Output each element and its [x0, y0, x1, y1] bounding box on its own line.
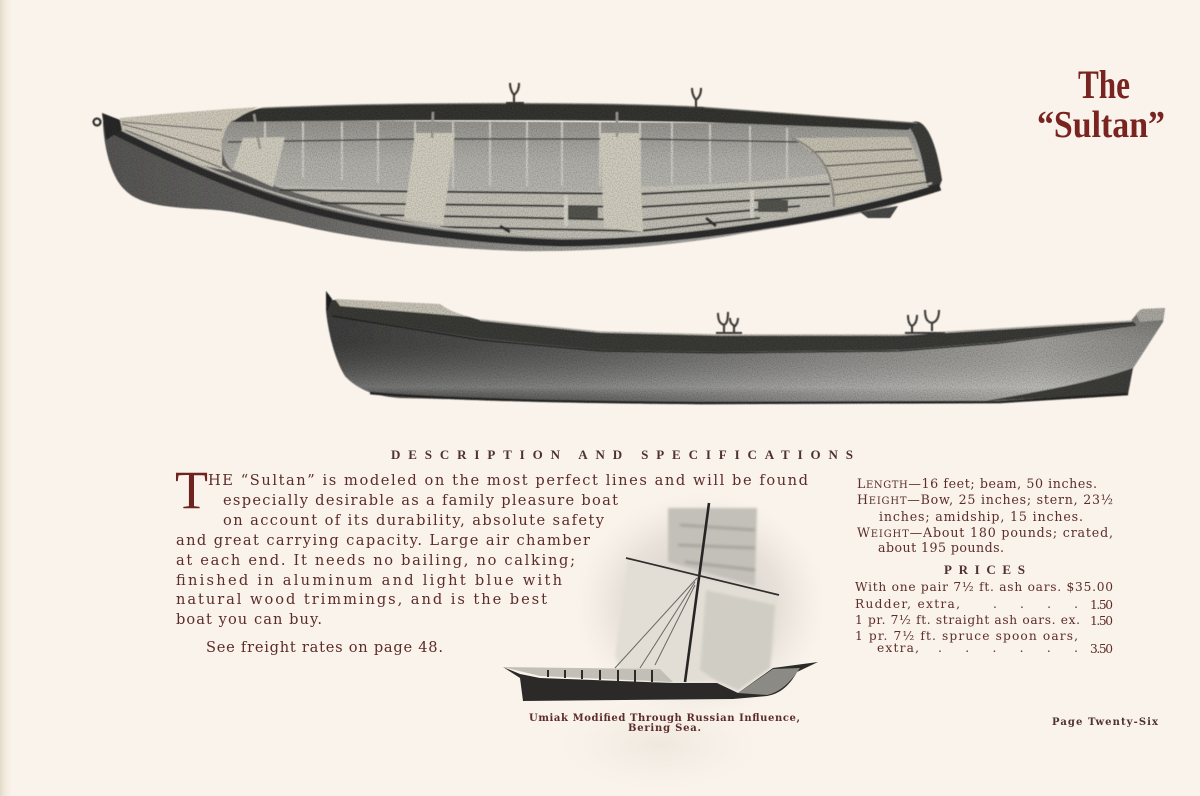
- stem: [326, 291, 332, 312]
- specifications: inches; amidship, 15 inches.: [879, 509, 1083, 524]
- bow deck: [120, 107, 258, 172]
- caption: Bering Sea.: [628, 723, 701, 734]
- sheer strake: [328, 300, 1136, 352]
- keel line: [370, 393, 1128, 403]
- hull interior: [503, 667, 673, 682]
- price list: 1.50: [1090, 614, 1113, 628]
- stern transom: [910, 122, 942, 190]
- photo: umiak with sails: [503, 493, 825, 790]
- heading: description and specifications: DESCRIPTION AND SPECIFICATIONS: [391, 447, 853, 462]
- hull exterior: [103, 122, 940, 251]
- description paragraph: [175, 460, 808, 656]
- title: The Sultan: [1037, 62, 1165, 146]
- seat: bow: [233, 137, 285, 187]
- ribs and stringer: [265, 122, 787, 188]
- lower gunwale: [108, 128, 940, 243]
- mast: [685, 503, 709, 682]
- photo: side view of boat: [326, 291, 1165, 404]
- yard: [626, 558, 779, 595]
- upper gunwale: [232, 103, 917, 130]
- stern shadow: [985, 368, 1133, 401]
- price list: [855, 580, 1113, 656]
- inner oarlock: [500, 218, 716, 232]
- floor slats: [272, 178, 834, 238]
- seat supports: [254, 112, 617, 149]
- description paragraph: natural wood trimmings, and is the best: [176, 591, 547, 608]
- photo: top view of boat: [94, 83, 942, 251]
- oarlock pair right: [905, 310, 945, 333]
- specifications: WEIGHT—About 180 pounds; crated,: [857, 525, 1113, 540]
- keel skeg: [860, 206, 898, 218]
- oarlock pair left: [716, 312, 742, 333]
- stern deck: [792, 137, 930, 207]
- page number: Page Twenty-Six: [1052, 717, 1159, 728]
- stern cap: [1136, 308, 1165, 322]
- price list: extra,: [877, 641, 919, 655]
- description paragraph: finished in aluminum and light blue with: [176, 572, 562, 589]
- hull side: [326, 292, 1165, 404]
- specifications: [857, 476, 1113, 555]
- price list: 1.50: [1090, 598, 1113, 612]
- specifications: HEIGHT—Bow, 25 inches; stern, 23½: [857, 492, 1113, 507]
- drop cap: T: [175, 460, 208, 520]
- rigging: [615, 578, 697, 668]
- price list: . . . . . .: [938, 641, 1078, 655]
- price list: 3.50: [1090, 642, 1113, 656]
- description paragraph: HE “Sultan” is modeled on the most perfect lines and will be found: [208, 472, 808, 489]
- title: The Sultan: “Sultan”: [1037, 104, 1165, 146]
- description paragraph: on account of its durability, absolute safety: [223, 512, 605, 529]
- seat: middle: [404, 133, 455, 225]
- oarlock right: [688, 88, 704, 108]
- caption: Umiak Modified Through Russian Influence,: [529, 713, 800, 724]
- specifications: LENGTH—16 feet; beam, 50 inches.: [857, 476, 1097, 491]
- description paragraph: at each end. It needs no bailing, no calking;: [176, 552, 575, 569]
- interior wall: [222, 120, 930, 238]
- description paragraph: especially desirable as a family pleasure boat: [223, 492, 618, 509]
- price list: With one pair 7½ ft. ash oars. $35.00: [855, 580, 1113, 594]
- description paragraph: and great carrying capacity. Large air chamber: [176, 532, 590, 549]
- price list: . . . .: [993, 597, 1078, 611]
- caption: [529, 713, 800, 734]
- bow stem and ring: [102, 113, 122, 140]
- price list: Rudder, extra,: [855, 597, 960, 611]
- bow deck edge: [335, 299, 470, 317]
- price list: 1 pr. 7½ ft. spruce spoon oars,: [855, 629, 1078, 643]
- sails: [615, 508, 778, 692]
- price list: 1 pr. 7½ ft. straight ash oars. ex.: [855, 613, 1080, 627]
- specifications: about 195 pounds.: [878, 540, 1004, 555]
- oarlock left: [506, 83, 524, 103]
- description paragraph: See freight rates on page 48.: [206, 639, 443, 656]
- hull: [503, 662, 818, 701]
- seat: stern: [600, 133, 643, 232]
- prices heading: PRICES: [944, 562, 1025, 577]
- title: The Sultan: The: [1078, 62, 1130, 107]
- description paragraph: boat you can buy.: [176, 611, 322, 628]
- vignette: [575, 493, 825, 717]
